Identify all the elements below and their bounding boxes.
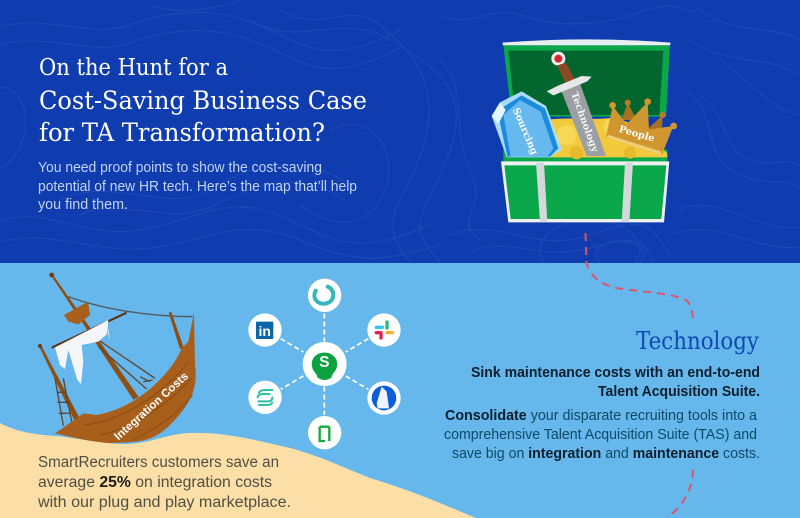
hub: SmartRecruiters <box>303 342 347 386</box>
chest lid <box>502 39 671 163</box>
intro text: you find them. <box>38 196 128 213</box>
panel: dark blue header background <box>0 0 800 280</box>
icon: Slack <box>367 313 401 347</box>
icon: Greenhouse logo <box>308 416 341 449</box>
body text: consolidate: save big on integration and maintenance costs. <box>452 445 760 462</box>
heading: Technology: Technology <box>636 326 759 355</box>
subheading: sink maintenance costs <box>471 364 760 400</box>
hub: SmartRecruiters: S <box>319 354 329 371</box>
gem: Sourcing: Sourcing <box>510 106 540 157</box>
crown: People: People <box>618 124 656 145</box>
dashed trail below Technology <box>667 470 693 518</box>
icon: fingerprint logo <box>248 381 282 414</box>
gold coins <box>547 117 667 159</box>
icon: LinkedIn: in <box>258 323 271 339</box>
subheading: sink maintenance costs: Sink maintenance costs with an end-to-end <box>471 364 760 381</box>
title <box>39 53 367 147</box>
title: for TA Transformation? <box>39 118 325 147</box>
panel: light blue sea background <box>0 263 800 518</box>
body text: consolidate: comprehensive Talent Acquisition Suite (TAS) and <box>444 426 757 443</box>
gem: Sourcing <box>492 91 562 157</box>
sand beach <box>0 423 476 518</box>
icon: sunken ship <box>38 273 196 443</box>
chest base <box>501 161 669 222</box>
intro text: You need proof points to show the cost-saving <box>38 159 322 176</box>
sand text: integration savings: average 25% on integration costs <box>38 474 272 491</box>
body text: consolidate: Consolidate your disparate recruiting tools into a <box>445 407 758 424</box>
icon: sunken ship: Integration Costs <box>112 370 191 443</box>
title: Cost-Saving Business Case <box>39 86 367 115</box>
sand text: integration savings <box>37 454 291 511</box>
icon: ring logo <box>308 279 341 312</box>
icon: blue logo <box>367 381 401 415</box>
subheading: sink maintenance costs: Talent Acquisition Suite. <box>598 383 760 400</box>
icon: treasure chest <box>492 39 677 222</box>
crown: People <box>606 98 677 155</box>
dashed trail from chest to Technology <box>586 233 693 322</box>
icon: LinkedIn <box>248 313 282 347</box>
sword: Technology: Technology <box>568 91 600 154</box>
sword: Technology <box>547 52 606 156</box>
intro text <box>38 159 357 213</box>
body text: consolidate <box>444 407 760 462</box>
sand text: integration savings: with our plug and play marketplace. <box>37 494 291 511</box>
intro text: potential of new HR tech. Here’s the map that’ll help <box>38 178 357 195</box>
integrations hub diagram <box>248 279 401 449</box>
sand text: integration savings: SmartRecruiters customers save an <box>38 454 279 471</box>
title: On the Hunt for a <box>39 53 228 81</box>
